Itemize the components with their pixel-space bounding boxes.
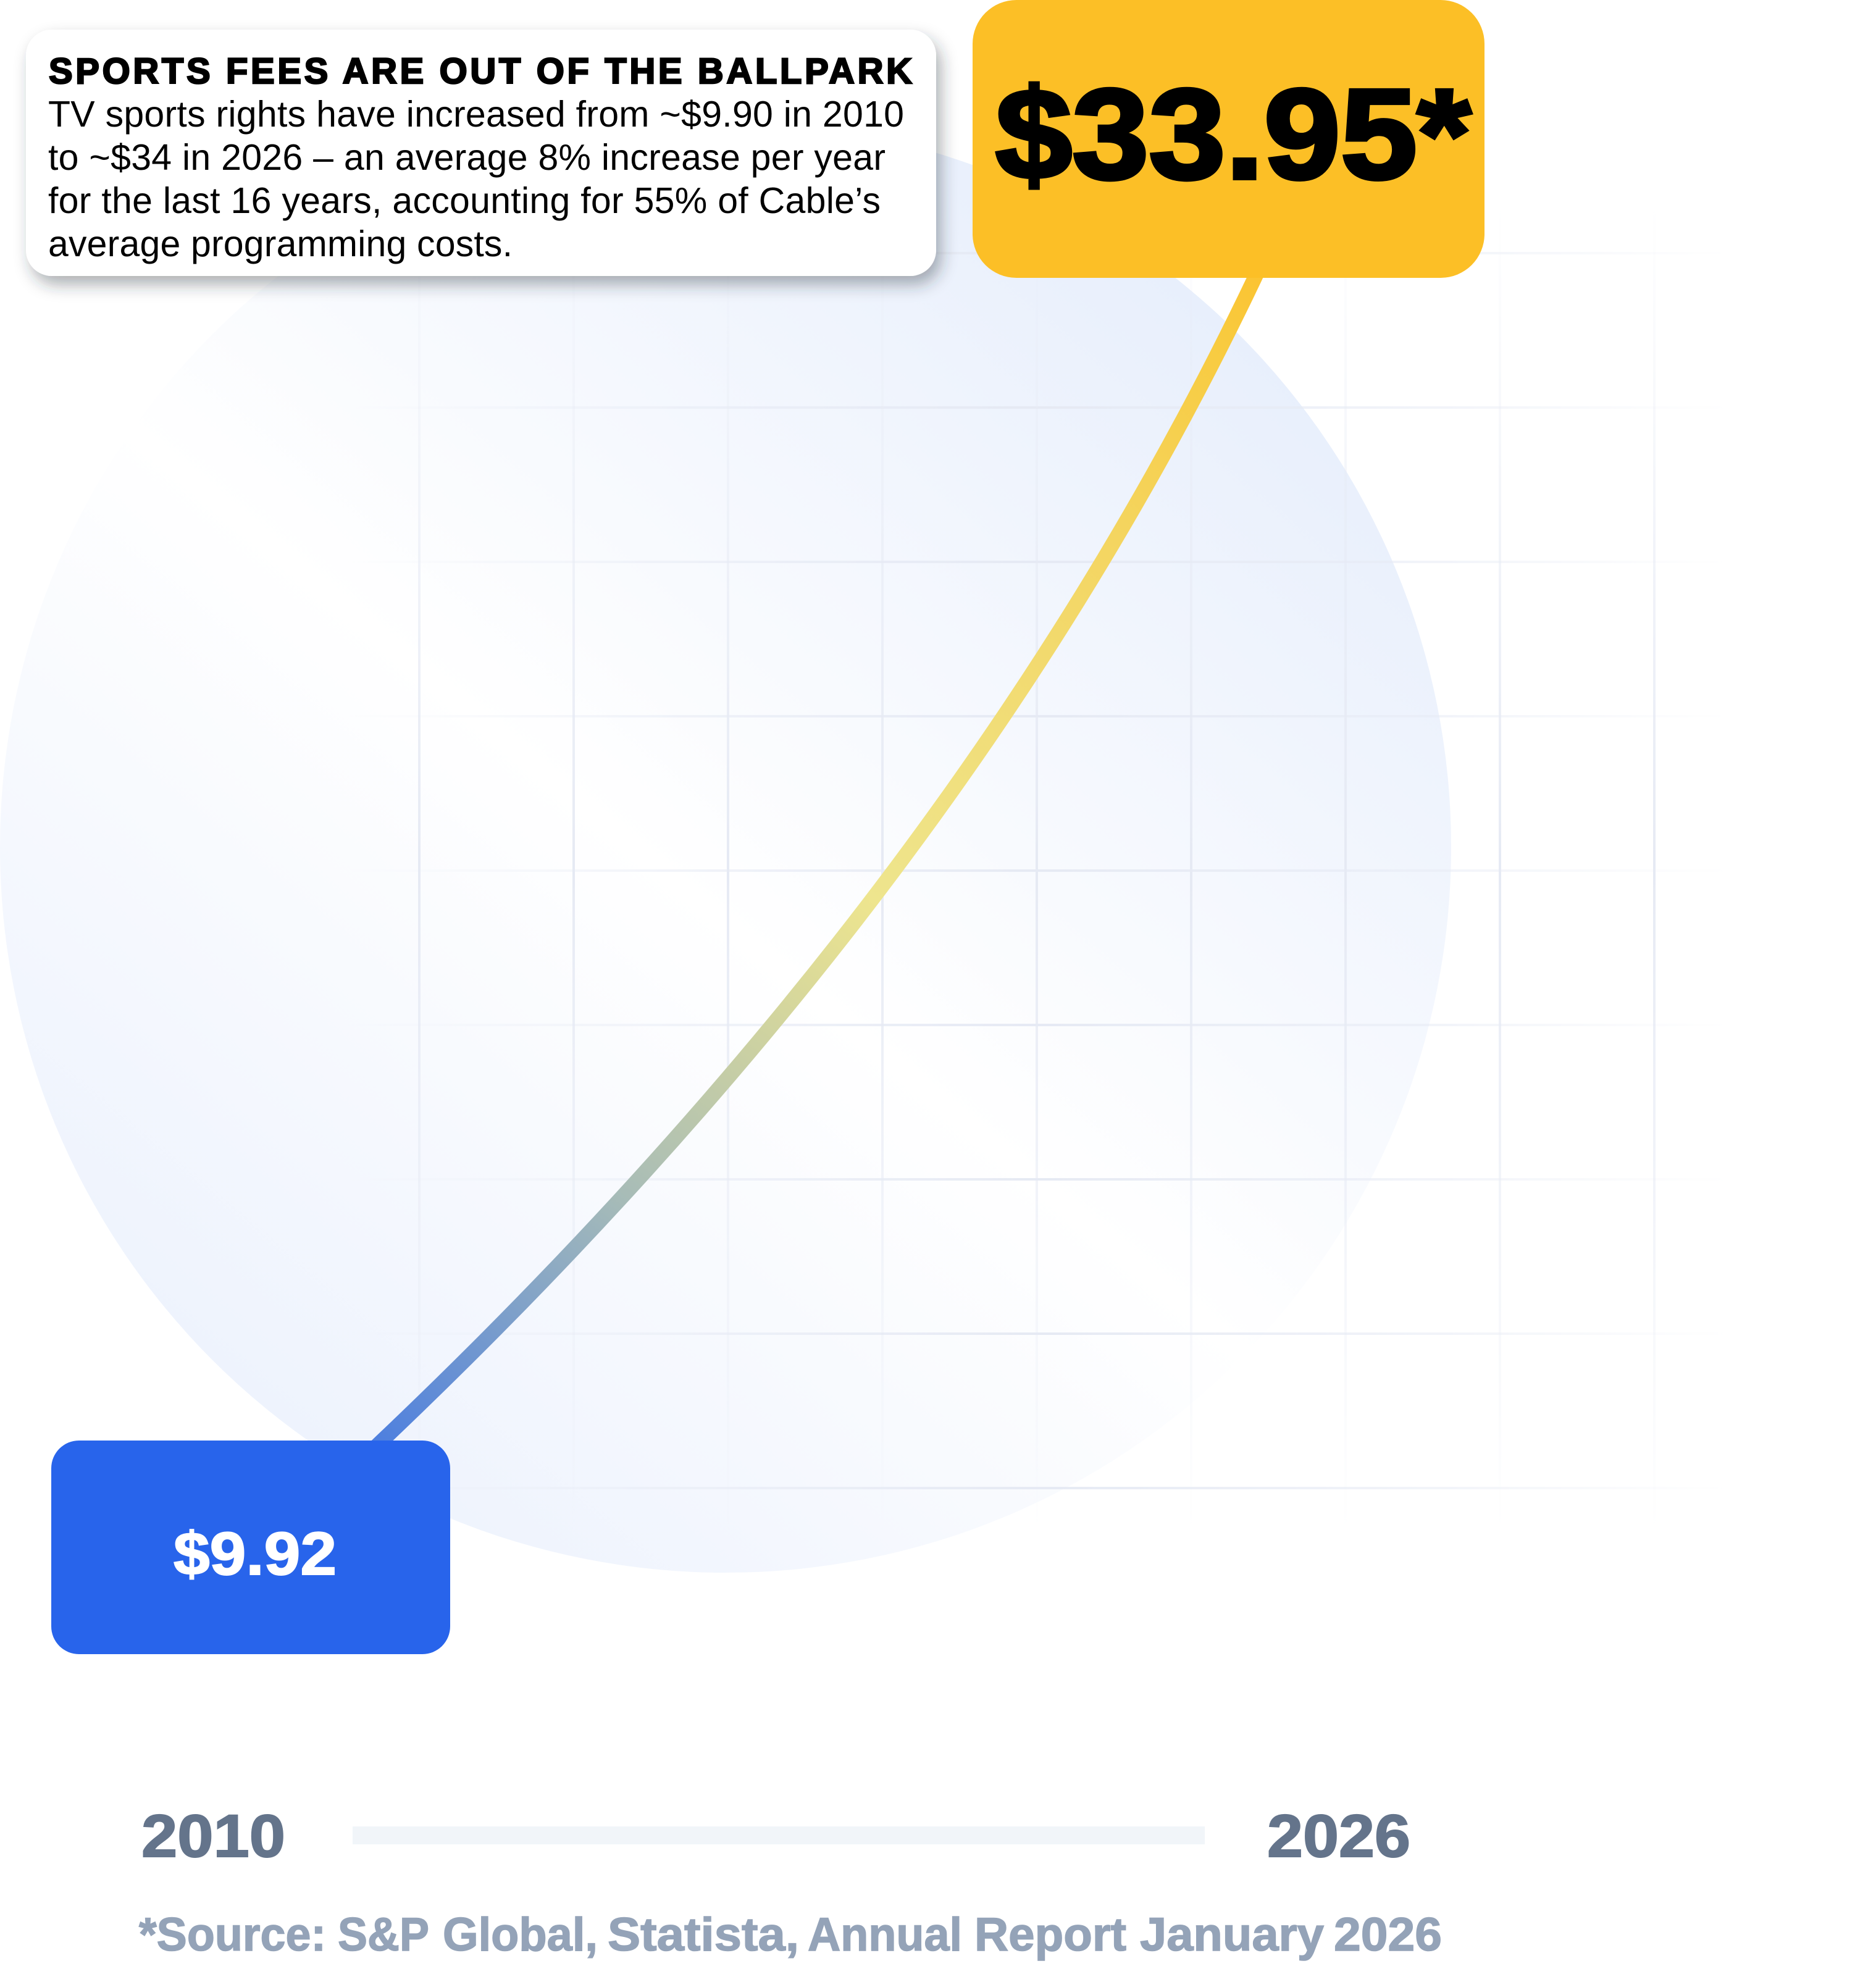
2010 value label: $9.92 — [174, 1520, 337, 1587]
source note: *Source: — [139, 1909, 326, 1961]
start year: 2010 — [141, 1802, 285, 1870]
card heading: SPORTS FEES ARE OUT OF THE BALLPARK — [49, 51, 912, 91]
background circle — [0, 122, 1451, 1573]
source note: Statista, — [608, 1909, 799, 1961]
source note: January — [1140, 1909, 1324, 1961]
chart grid — [346, 204, 1729, 1531]
card body text: for the last 16 years, accounting for 55% of Cable’s — [48, 180, 881, 221]
source note: Annual — [808, 1909, 962, 1961]
source note: Report — [974, 1909, 1126, 1961]
2026 value label: $33.95* — [995, 63, 1471, 206]
card body text — [48, 94, 904, 264]
card background — [26, 30, 936, 276]
card body text: to ~$34 in 2026 – an average 8% increase per year — [48, 137, 886, 178]
growth curve — [364, 259, 1263, 1458]
source note: S&P — [338, 1909, 429, 1961]
2026 value label — [973, 0, 1484, 278]
timeline axis — [141, 1802, 1410, 1870]
2010 value label — [51, 1441, 450, 1654]
card body text: TV sports rights have increased from ~$9.90 in 2010 — [48, 94, 904, 135]
source note — [139, 1909, 1442, 1961]
end year: 2026 — [1267, 1802, 1410, 1870]
source note: 2026 — [1334, 1909, 1442, 1961]
timeline bar — [353, 1826, 1205, 1844]
card body text: average programming costs. — [48, 224, 513, 264]
source note: Global, — [443, 1909, 598, 1961]
callout card — [26, 30, 936, 276]
